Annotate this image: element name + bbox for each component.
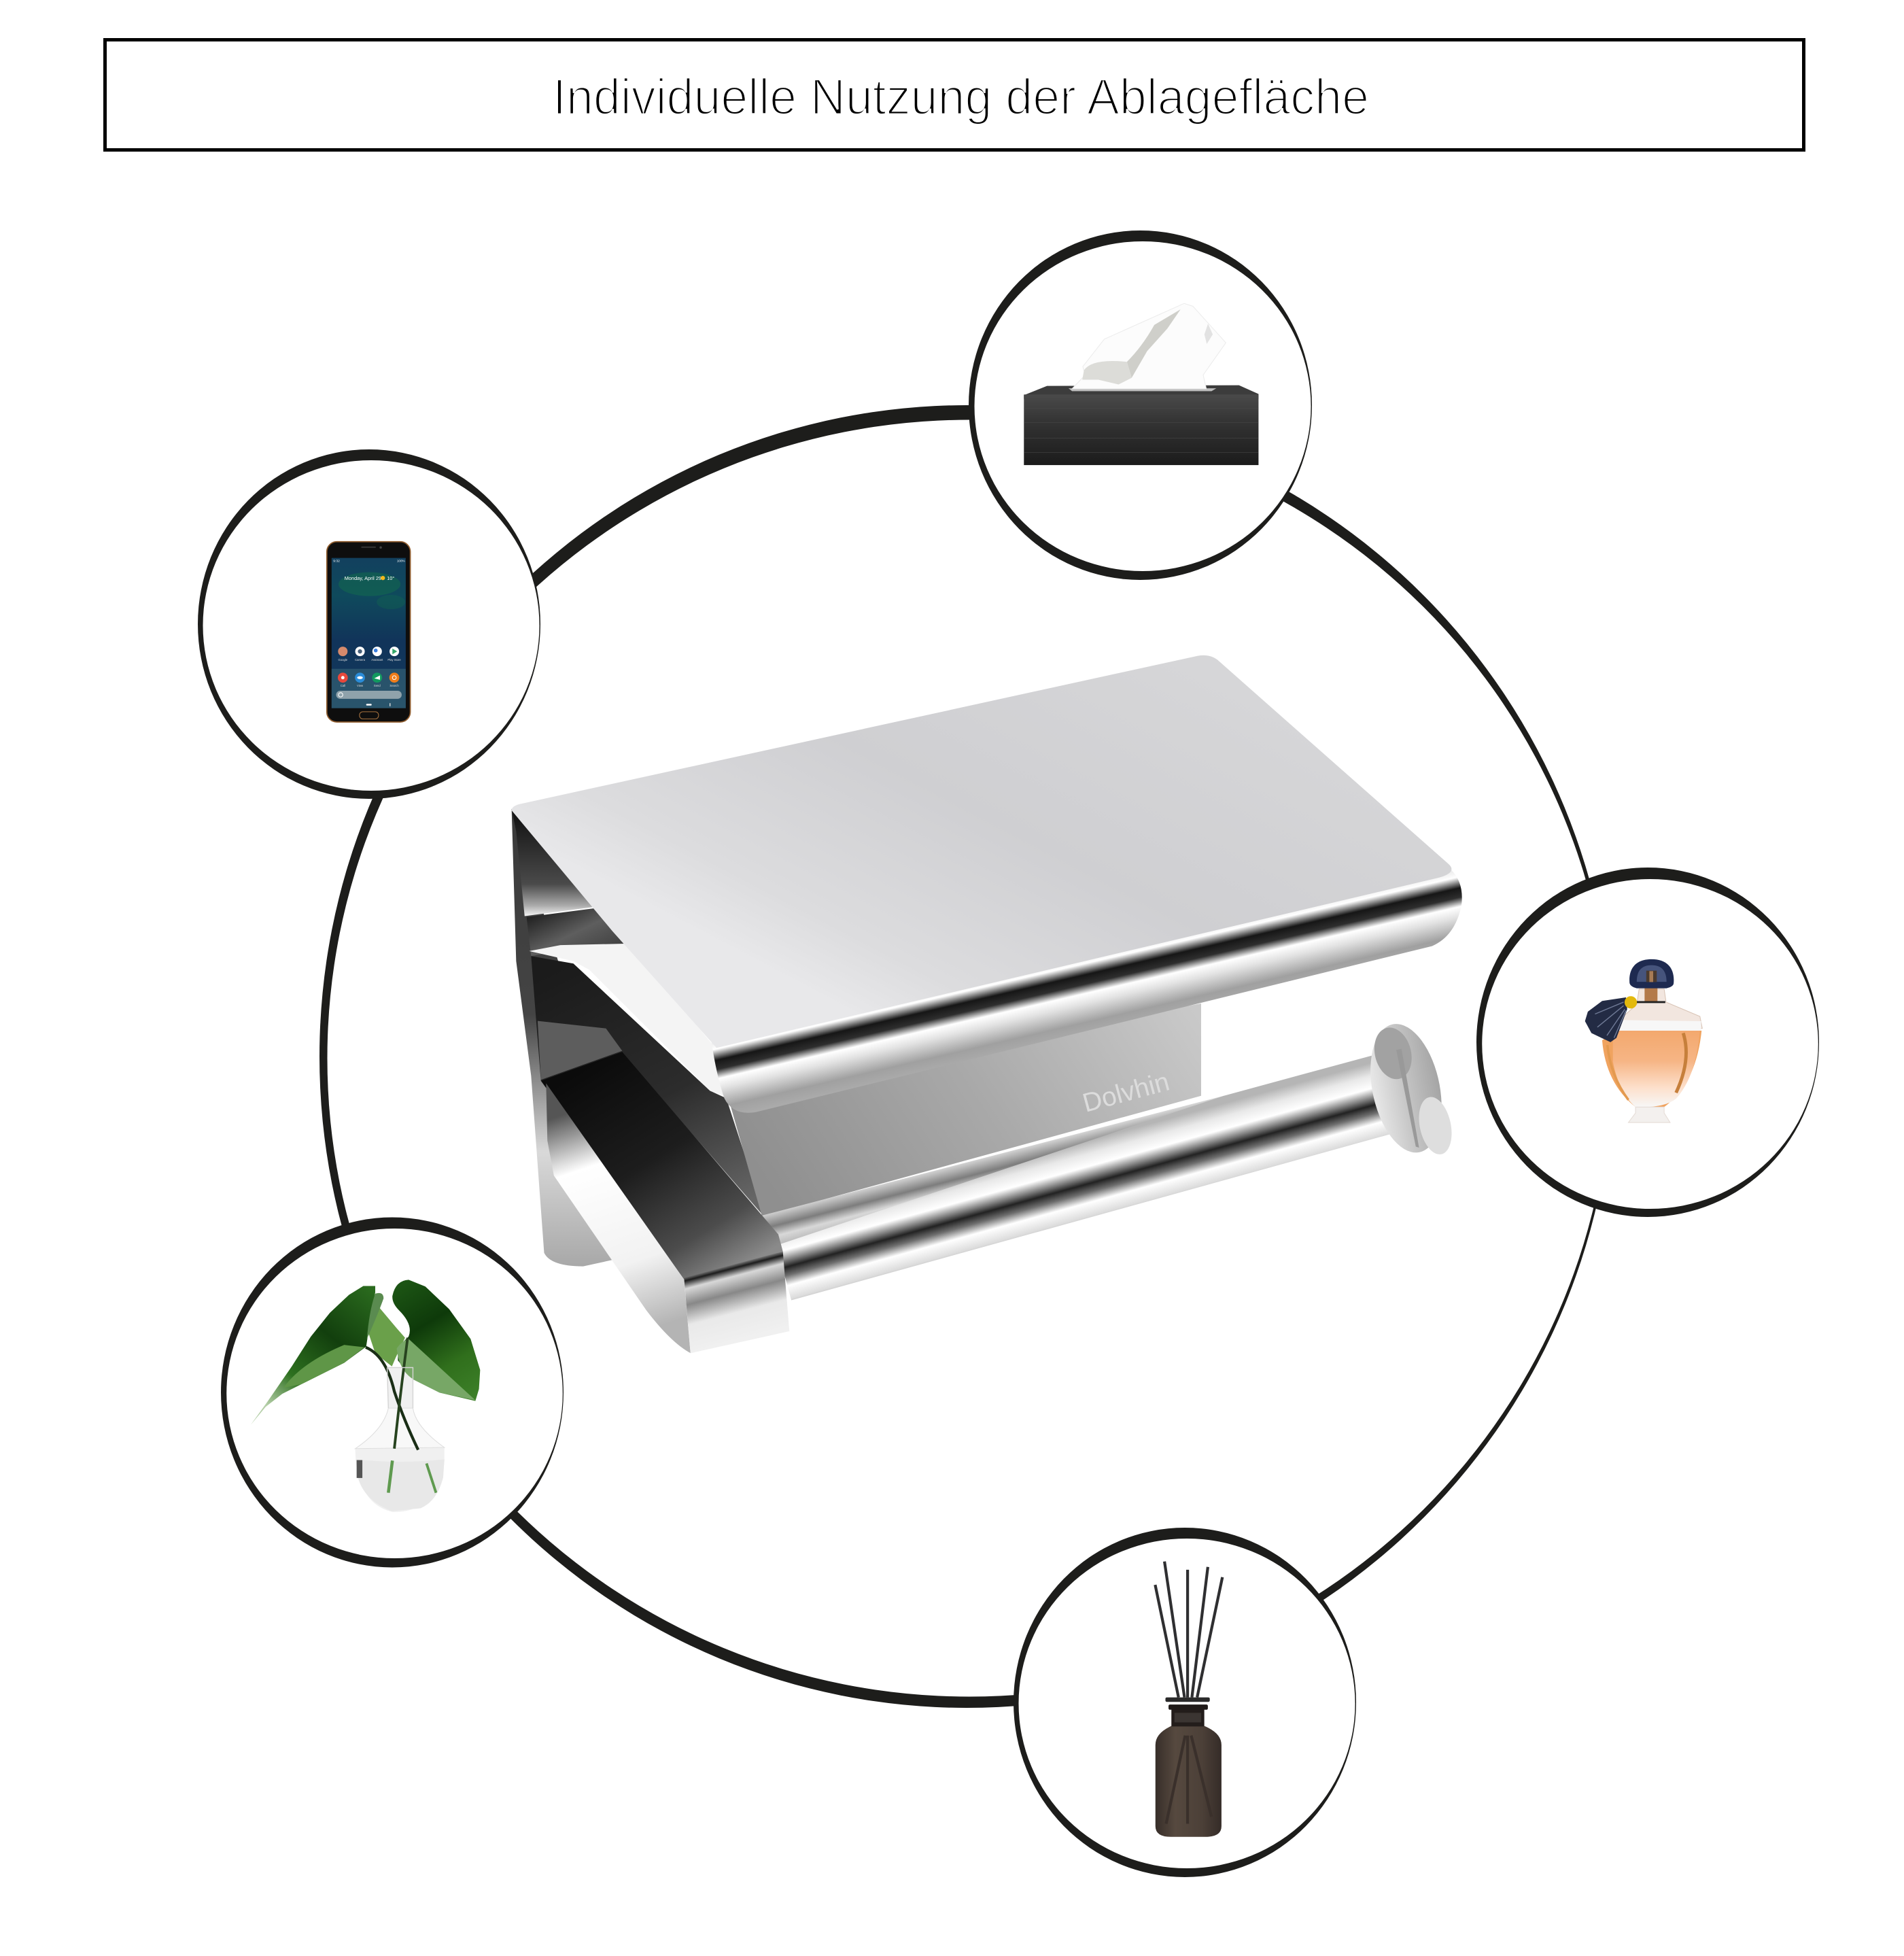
connecting ring xyxy=(319,405,1614,1708)
icon: smartphone: 9:32 xyxy=(333,560,340,564)
icon: perfume bottle xyxy=(1585,959,1702,1122)
icon: smartphone: Send xyxy=(374,684,381,687)
icon: smartphone: 100% xyxy=(397,560,405,563)
left leaf xyxy=(251,1286,375,1425)
icon: smartphone: Play Store xyxy=(387,658,401,662)
bottle xyxy=(1156,1726,1222,1837)
paper rod xyxy=(762,1020,1456,1301)
brand text: Dolvhin xyxy=(1079,1067,1173,1118)
icon: smartphone: Search xyxy=(390,684,399,687)
wall block xyxy=(726,1003,1201,1216)
icon: plant in glass vase xyxy=(251,1280,480,1512)
title text: Individuelle Nutzung der Ablagefläche xyxy=(553,69,1369,125)
arm front chrome xyxy=(684,1252,789,1353)
vase xyxy=(356,1367,445,1512)
rod end cap xyxy=(1361,1020,1456,1156)
circle: phone xyxy=(198,449,540,799)
small curled leaf xyxy=(367,1293,383,1339)
stems xyxy=(366,1348,418,1450)
icon: smartphone: Assistant xyxy=(371,658,383,662)
mirror side faces xyxy=(512,809,765,1218)
tissue xyxy=(1072,303,1226,389)
icon: smartphone: Call xyxy=(341,684,345,687)
circle: plant xyxy=(221,1217,564,1568)
arm side chrome xyxy=(546,1083,691,1353)
shelf lip xyxy=(711,870,1462,1113)
right leaf xyxy=(392,1280,480,1401)
icon: smartphone: Camera xyxy=(355,658,366,662)
icon: smartphone: View xyxy=(357,684,364,687)
circle: tissue box xyxy=(969,230,1312,580)
icon: tissue box xyxy=(1024,303,1258,465)
icon: smartphone xyxy=(327,542,411,722)
reeds xyxy=(1155,1562,1222,1698)
dark arm top xyxy=(541,1052,783,1280)
icon: smartphone: Monday, April 29 xyxy=(345,575,381,581)
toilet paper holder with shelf xyxy=(512,655,1462,1353)
tassel xyxy=(1585,996,1637,1042)
shelf top xyxy=(512,655,1451,1048)
back plate xyxy=(512,809,629,1267)
back leaf xyxy=(368,1305,405,1367)
title box xyxy=(105,39,1804,150)
icon: smartphone: Google xyxy=(339,658,348,662)
circle: reed diffuser xyxy=(1014,1528,1356,1877)
icon: reed diffuser xyxy=(1155,1562,1222,1837)
vase neck xyxy=(387,1367,413,1408)
icon: smartphone: 10° xyxy=(387,575,394,581)
circle: perfume xyxy=(1476,868,1819,1217)
